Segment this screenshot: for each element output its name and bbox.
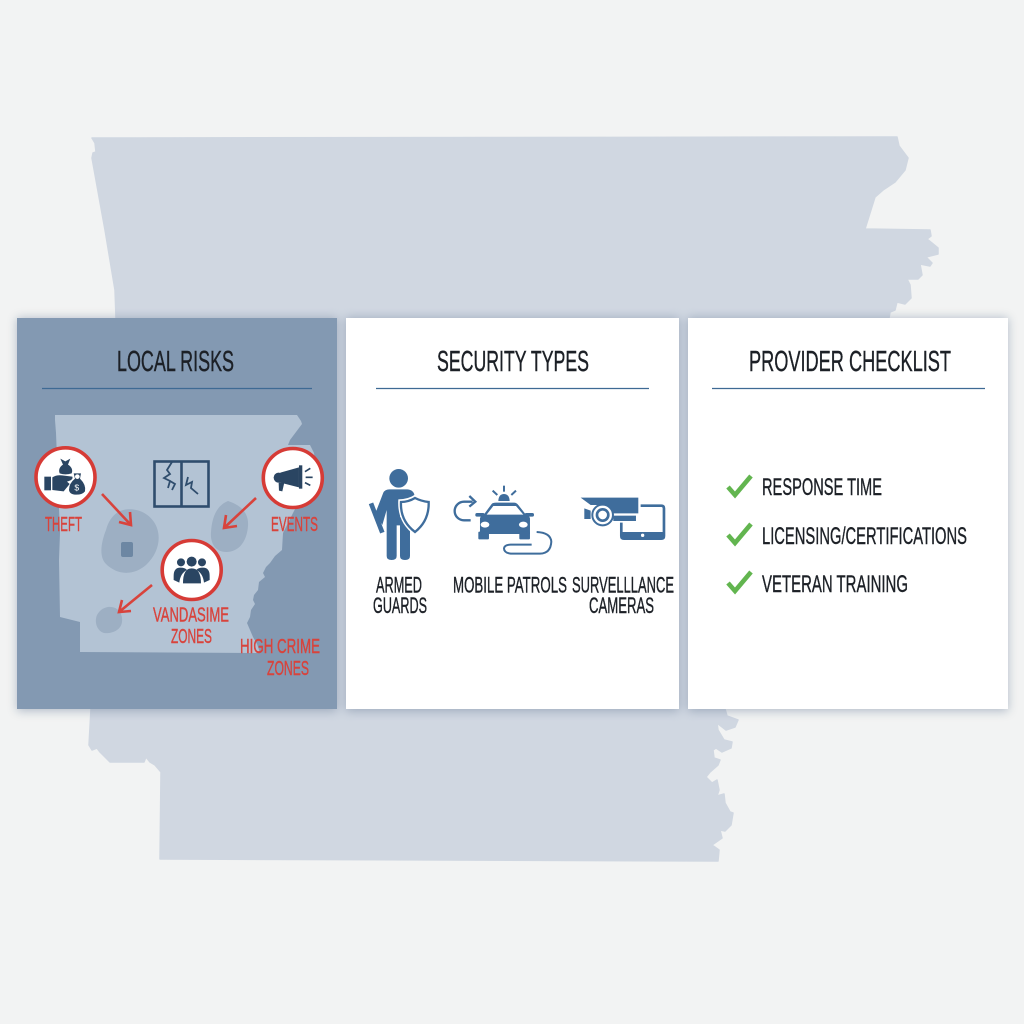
item: response time: RESPONSE TIME [762,474,882,501]
label: events: EVENTS [271,514,318,536]
heading: local risks: LOCAL RISKS [117,346,234,378]
label: high crime zones [240,636,320,680]
high crime blob: east [211,501,248,552]
icon: check 3 [728,572,751,591]
icon: theft [36,448,95,507]
label: vandasime zones [153,604,229,648]
panel: local risks [17,318,337,709]
label: vandasime zones: VANDASIME [153,604,229,626]
icon: broken window [154,461,208,507]
inset state map [55,415,318,653]
high crime blob: centre [101,509,159,573]
label: armed guards: ARMED [376,573,422,598]
crime marker square [121,542,133,557]
label: theft: THEFT [45,514,82,536]
icon: surveillance camera and tablet [581,498,664,539]
label: vandasime zones: ZONES [171,626,212,648]
item: veteran training: VETERAN TRAINING [762,571,908,598]
panel: provider checklist [688,318,1008,709]
icon: vandalism crowd [162,540,221,600]
label: high crime zones: ZONES [267,658,309,680]
arrow: events to east zone [224,498,256,528]
icon: patrol car [455,486,551,554]
label: high crime zones: HIGH CRIME [240,636,320,658]
icon: theft: $ [74,483,79,493]
icon: check 1 [728,476,751,495]
panel shadows [17,318,1008,711]
high crime blob: southwest [96,607,122,633]
label: surveillance cameras: CAMERAS [589,593,654,618]
icon: events megaphone [263,448,322,508]
arrow: theft to centre zone [102,494,131,525]
label: mobile patrols: MOBILE PATROLS [453,573,567,598]
label: armed guards [373,573,427,618]
label: surveillance cameras: SURVELLLANCE [572,573,674,598]
panel: security types [346,318,679,709]
icon: check 2 [728,524,751,543]
arrow: vandalism to southwest zone [119,585,152,612]
label: surveillance cameras [572,573,674,618]
background state map silhouette [89,137,938,861]
label: armed guards: GUARDS [373,593,427,618]
icon: armed guard [371,469,431,560]
heading: security types: SECURITY TYPES [437,346,589,378]
